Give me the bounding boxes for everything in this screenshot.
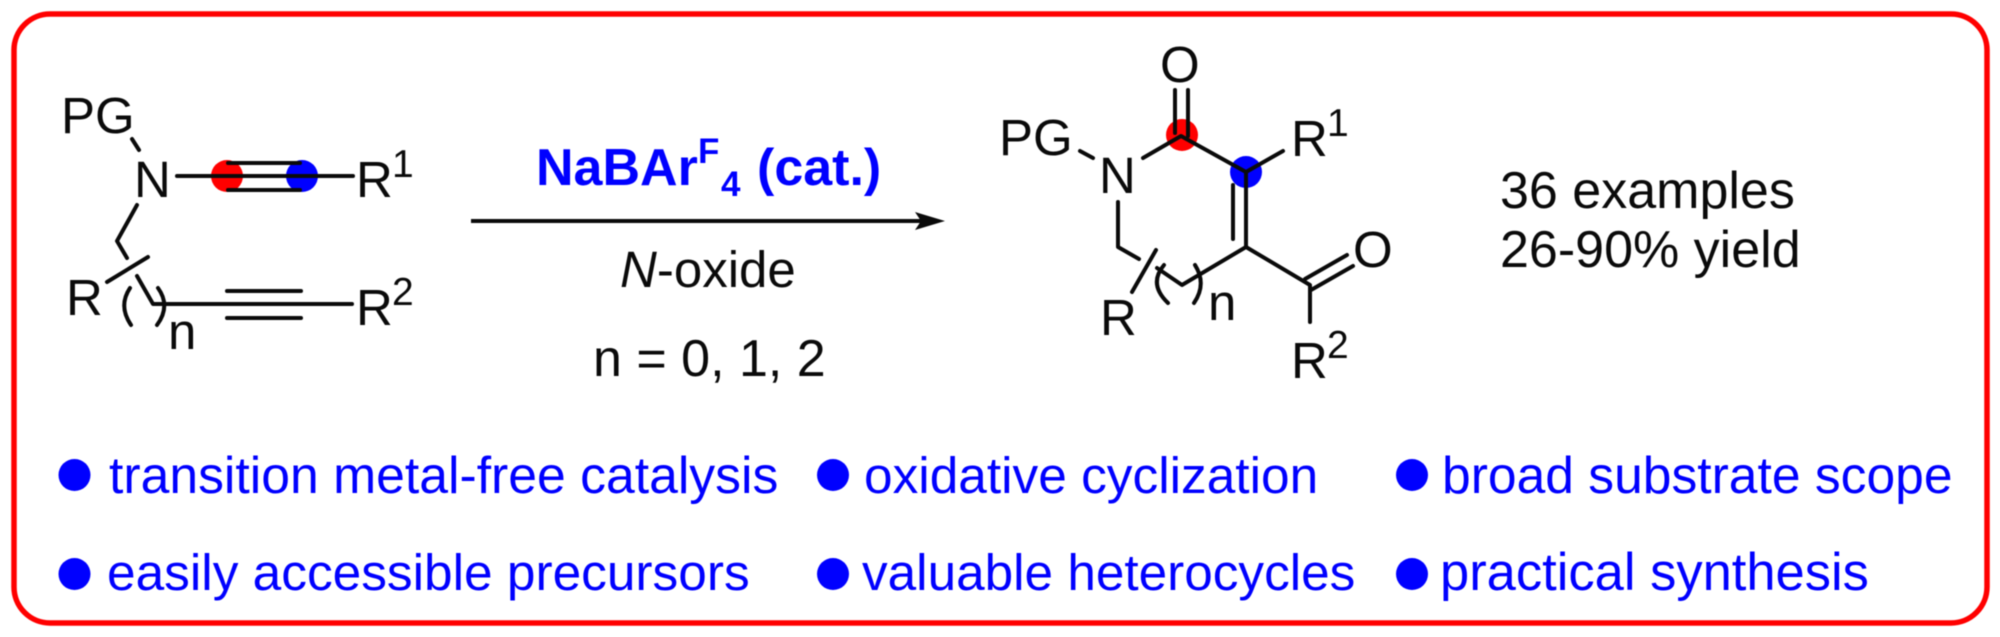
substrate atom labels: R [356,279,393,336]
condition: n values: n = 0, 1, 2 [593,330,826,388]
product atom labels: O [1160,36,1200,93]
product structure: fused enone lactam [999,36,1393,389]
substrate structure: ynamide diyne [61,87,414,360]
substrate atom labels: R [66,269,103,326]
substrate atom labels: N [134,151,171,208]
product atom labels: 2 [1327,324,1349,367]
scope summary text [1500,162,1801,279]
product atom labels: R [1291,110,1328,167]
product bonds [1080,90,1353,322]
catalyst label: 4 [721,165,741,204]
scope summary text: 26-90% yield [1500,221,1801,279]
product atom labels [999,36,1393,389]
blue alkene carbon marker [1230,156,1262,188]
product atom labels: R [1100,289,1137,346]
product atom labels: N [1099,147,1136,204]
feature list: oxidative cyclization: oxidative cyclization [864,446,1318,504]
substrate atom labels: 1 [392,143,414,186]
feature list: transition metal-free catalysis: transition metal-free catalysis [109,446,778,504]
catalyst label: F [698,132,719,171]
catalyst label: (cat.) [757,139,881,197]
red carbonyl carbon marker [1166,119,1198,151]
product atom labels: n [1208,274,1236,331]
feature list: valuable heterocycles: valuable heterocycles [862,544,1355,601]
substrate atom labels [61,87,414,360]
oxidant label: N-oxide [620,241,796,298]
product atom labels: PG [999,109,1073,166]
product atom labels: 1 [1327,102,1349,145]
feature list: easily accessible precursors: easily accessible precursors [107,543,750,601]
substrate atom labels: 2 [392,271,414,314]
catalyst label: NaBAr [536,139,698,197]
product atom labels: O [1353,221,1393,278]
substrate atom labels: R [356,151,393,208]
feature list: broad substrate scope: broad substrate scope [1442,446,1953,504]
feature list: practical synthesis: practical synthesis [1440,543,1869,602]
red carbon marker [211,160,243,192]
scope summary text: 36 examples [1500,162,1795,220]
substrate atom labels: PG [61,87,135,144]
blue carbon marker [286,160,318,192]
substrate atom labels: n [168,303,196,360]
reaction arrow [471,212,945,230]
product atom labels: R [1291,332,1328,389]
substrate bonds [107,139,353,325]
